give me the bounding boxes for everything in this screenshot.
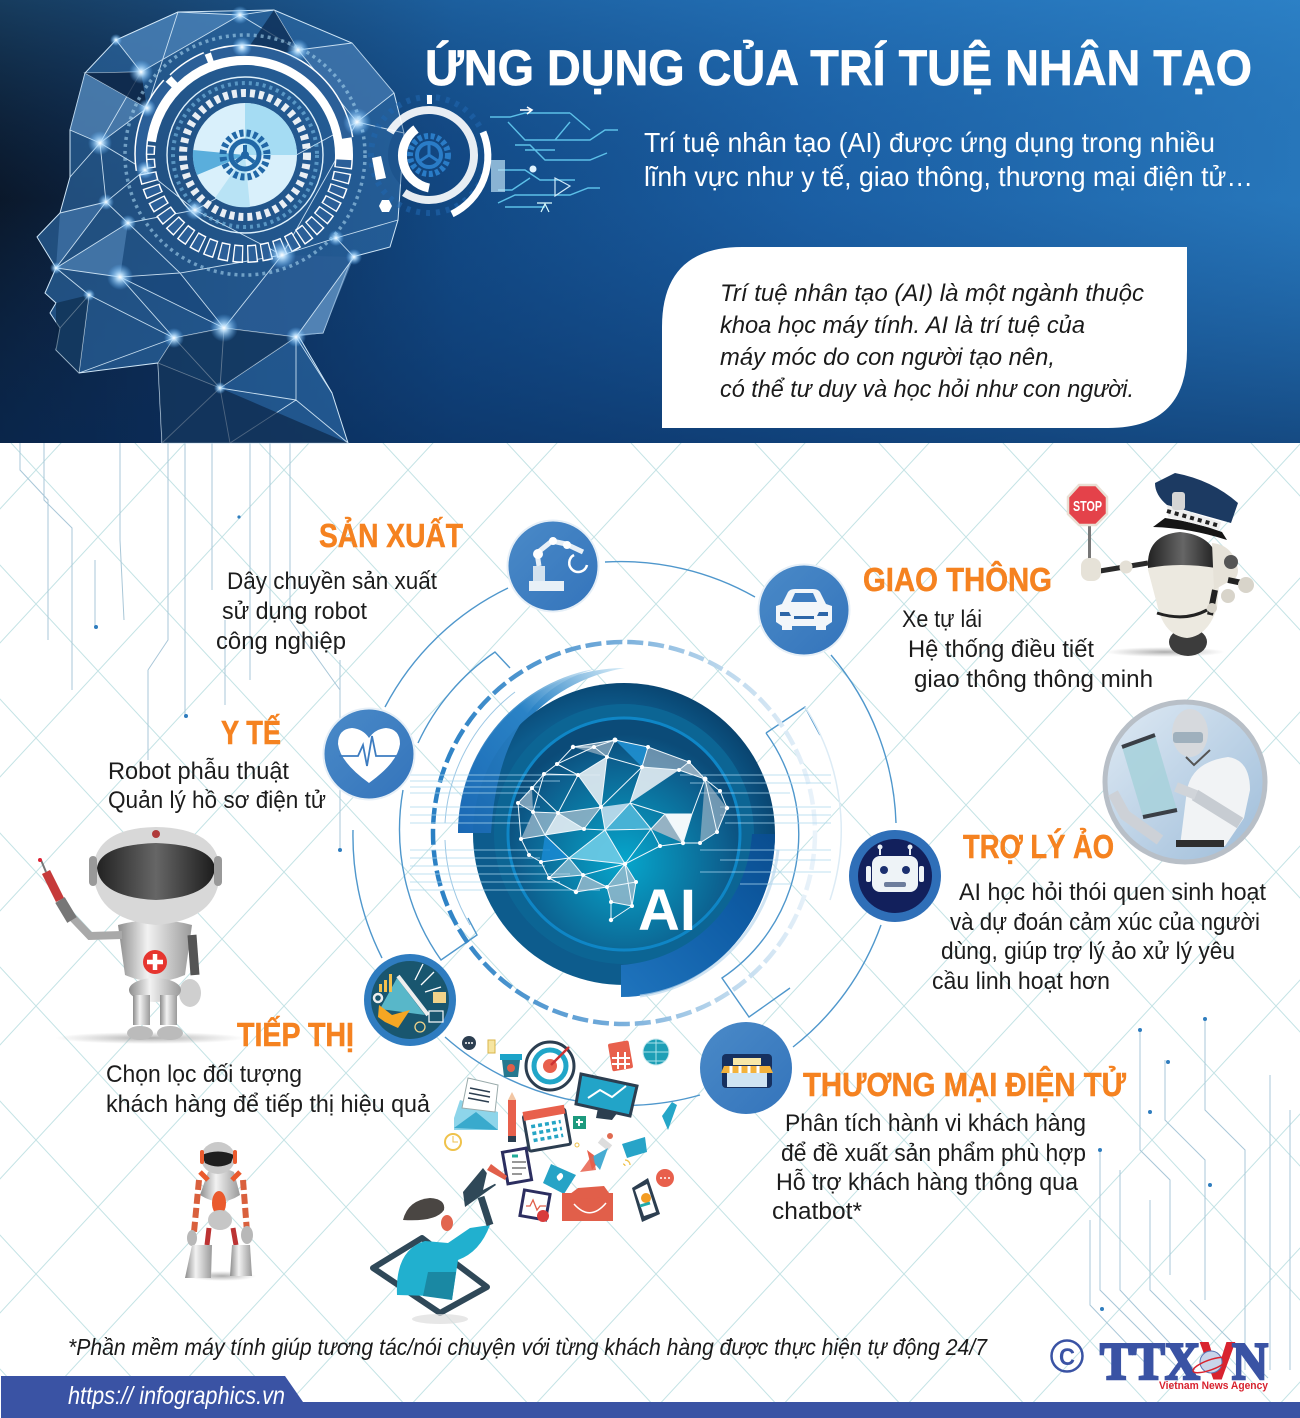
brain mesh (516, 738, 729, 922)
logo: TTXVN: N (1232, 1333, 1268, 1391)
icon: car (758, 564, 850, 656)
glowing nodes (50, 6, 371, 394)
description (216, 568, 437, 655)
person with megaphone on tablet (373, 1164, 507, 1324)
orange small robot (185, 1142, 256, 1281)
copyright symbol: C (1059, 1344, 1075, 1371)
marketing icon cluster (445, 1036, 677, 1222)
footer bar (1, 1376, 1300, 1418)
AI label: AI (638, 878, 696, 943)
icon: storefront (700, 1022, 792, 1114)
logo: TTXVN: TTX (1100, 1333, 1200, 1391)
description (772, 1110, 1086, 1225)
callout: định nghĩa AI: máy móc do con người tạo nên, (720, 344, 1055, 371)
callout: định nghĩa AI: Trí tuệ nhân tạo (AI) là một ngành thuộc (720, 280, 1144, 307)
section: y tế (108, 708, 414, 814)
subtitle: Trí tuệ nhân tạo (AI) được ứng dụng trong nhiều (644, 127, 1215, 158)
orbit rings (353, 562, 896, 1105)
heading: SẢN XUẤT (319, 517, 463, 554)
icon: heart (324, 708, 414, 800)
heading: TIẾP THỊ (237, 1016, 354, 1053)
section: thương mại điện tử (700, 1022, 1127, 1225)
footnote: *Phần mềm máy tính giúp tương tác/nói chuyện với từng khách hàng được thực hiện tự động 24/7 (68, 1334, 988, 1360)
description: khách hàng để tiếp thị hiệu quả (106, 1091, 430, 1118)
description (106, 1061, 430, 1118)
gear rings (125, 35, 365, 283)
description: AI học hỏi thói quen sinh hoạt (959, 879, 1266, 906)
circuit lines top left (20, 443, 342, 852)
description: để đề xuất sản phẩm phù hợp (781, 1140, 1086, 1167)
description: Hệ thống điều tiết (908, 636, 1094, 663)
data lines (410, 775, 831, 890)
description (108, 758, 326, 814)
description: Dây chuyền sản xuất (227, 568, 437, 595)
description: cầu linh hoạt hơn (932, 968, 1110, 995)
logo: TTXVN: V (1200, 1332, 1235, 1391)
police robot with stop sign (1068, 473, 1254, 657)
section: giao thông (758, 560, 1153, 693)
description: Xe tự lái (902, 606, 982, 633)
heading: Y TẾ (221, 714, 281, 751)
description: Robot phẫu thuật (108, 758, 289, 785)
section: sản xuất (216, 517, 598, 655)
title: ỨNG DỤNG CỦA TRÍ TUỆ NHÂN TẠO (425, 39, 1252, 96)
polygon head illustration (37, 6, 404, 443)
callout: định nghĩa AI: khoa học máy tính. AI là trí tuệ của (720, 312, 1085, 339)
humanoid robot with tablet (1105, 702, 1265, 862)
medical robot with syringe (38, 827, 245, 1044)
heading: TRỢ LÝ ẢO (963, 828, 1114, 865)
description: và dự đoán cảm xúc của người (950, 909, 1260, 936)
description (902, 606, 1153, 693)
description: giao thông thông minh (914, 666, 1153, 693)
header panel (0, 0, 1300, 443)
description: chatbot* (772, 1198, 862, 1225)
circuit lines bottom right (1090, 1017, 1290, 1378)
logo: TTXVN (1100, 1332, 1269, 1392)
icon: robot arm (508, 520, 598, 612)
description: sử dụng robot (222, 598, 367, 625)
description: công nghiệp (216, 628, 346, 655)
subtitle (644, 127, 1253, 192)
heading: THƯƠNG MẠI ĐIỆN TỬ (803, 1066, 1127, 1103)
description (932, 879, 1266, 995)
gauge and circuit illustration (368, 94, 618, 216)
footer bar: https:// infographics.vn (68, 1382, 285, 1410)
description: Hỗ trợ khách hàng thông qua (776, 1169, 1078, 1196)
description: Phân tích hành vi khách hàng (785, 1110, 1086, 1137)
description: dùng, giúp trợ lý ảo xử lý yêu (941, 938, 1235, 965)
logo: TTXVN: Vietnam News Agency (1159, 1380, 1269, 1392)
callout: định nghĩa AI: có thể tư duy và học hỏi như con người. (720, 376, 1134, 403)
subtitle: lĩnh vực như y tế, giao thông, thương mại điện tử… (644, 161, 1253, 192)
callout: định nghĩa AI (662, 247, 1187, 428)
icon: chatbot (849, 830, 941, 922)
police robot with stop sign: STOP (1073, 498, 1102, 515)
heading: GIAO THÔNG (863, 560, 1052, 598)
description: Quản lý hồ sơ điện tử (108, 787, 326, 814)
section: trợ lý ảo (849, 828, 1266, 995)
section: tiếp thị (106, 954, 456, 1118)
central AI brain circle (410, 668, 831, 997)
icon: megaphone (364, 954, 456, 1046)
description: Chọn lọc đối tượng (106, 1061, 302, 1088)
copyright symbol (1052, 1340, 1082, 1372)
